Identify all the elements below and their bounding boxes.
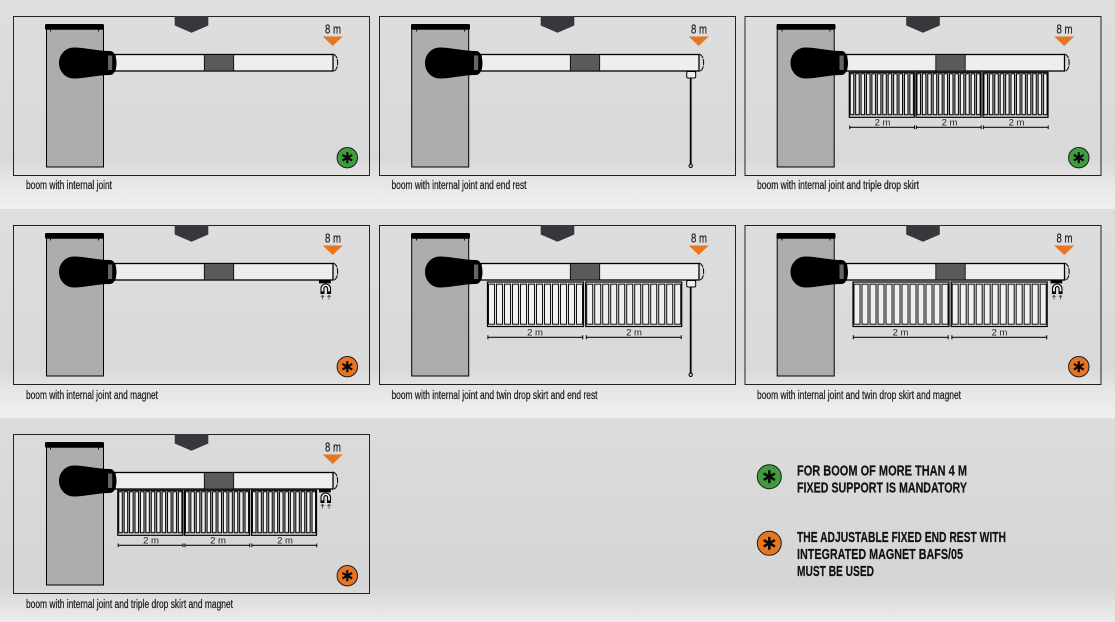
length label: 8 m bbox=[325, 440, 341, 454]
post bbox=[412, 236, 469, 376]
barrier gate bbox=[45, 434, 343, 496]
legend text: end rest with magnet: INTEGRATED MAGNET BAFS/05 bbox=[797, 546, 963, 563]
end rest bbox=[687, 280, 696, 376]
barrier gate bbox=[45, 225, 343, 288]
panel: boom with internal joint and twin drop skirt and magnet bbox=[745, 225, 1101, 402]
icon: green asterisk bbox=[1069, 148, 1089, 168]
dimensions: 2 m bbox=[893, 328, 909, 338]
dimensions bbox=[849, 118, 1048, 129]
post bbox=[46, 236, 104, 376]
dimensions: 2 m bbox=[942, 118, 958, 128]
length label: 8 m bbox=[325, 230, 341, 246]
legend text: fixed support: FIXED SUPPORT IS MANDATORY bbox=[797, 479, 967, 496]
dimensions bbox=[488, 328, 682, 339]
panel: boom with internal joint and magnet bbox=[14, 225, 370, 402]
panel: boom with internal joint and end rest bbox=[380, 16, 736, 192]
barrier gate bbox=[776, 16, 1074, 78]
dimensions: 2 m bbox=[143, 536, 159, 546]
triple drop skirt bbox=[118, 490, 316, 535]
caption: boom with internal joint and twin drop skirt and magnet bbox=[757, 390, 962, 402]
background band: row 3 bbox=[0, 418, 1115, 622]
panel: boom with internal joint and twin drop skirt and end rest bbox=[380, 225, 736, 402]
dimensions: 2 m bbox=[210, 536, 226, 546]
caption: boom with internal joint and triple drop skirt bbox=[757, 180, 920, 192]
legend text: end rest with magnet: THE ADJUSTABLE FIXED END REST WITH bbox=[797, 529, 1006, 546]
legend text: end rest with magnet bbox=[797, 529, 1006, 580]
dimensions: 2 m bbox=[992, 328, 1008, 338]
dimensions: 2 m bbox=[626, 328, 642, 338]
background band: row 1 bbox=[0, 0, 1115, 209]
length label: 8 m bbox=[325, 22, 341, 36]
post bbox=[777, 27, 834, 167]
background band: row 2 bbox=[0, 209, 1115, 418]
panel: boom with internal joint and triple drop skirt bbox=[745, 16, 1101, 192]
legend text: fixed support bbox=[797, 462, 967, 496]
dimensions: 2 m bbox=[527, 328, 543, 338]
caption: boom with internal joint and end rest bbox=[392, 180, 527, 192]
post bbox=[777, 236, 834, 376]
triple drop skirt bbox=[849, 72, 1048, 117]
icon: orange asterisk bbox=[1069, 356, 1089, 377]
caption: boom with internal joint and triple drop skirt and magnet bbox=[26, 599, 234, 611]
legend: orange note bbox=[757, 529, 1006, 580]
dimensions bbox=[853, 328, 1047, 339]
icon: magnet bbox=[1050, 280, 1062, 300]
panel: boom with internal joint and triple drop skirt and magnet bbox=[14, 434, 370, 611]
caption: boom with internal joint and magnet bbox=[26, 390, 159, 402]
icon: green asterisk bbox=[337, 148, 358, 168]
post bbox=[46, 445, 104, 585]
legend text: fixed support: FOR BOOM OF MORE THAN 4 M bbox=[797, 462, 967, 479]
length label: 8 m bbox=[691, 22, 707, 36]
length label: 8 m bbox=[1056, 230, 1072, 246]
end rest bbox=[687, 72, 696, 168]
dimensions bbox=[118, 536, 317, 547]
caption: boom with internal joint and twin drop skirt and end rest bbox=[392, 390, 598, 402]
barrier gate bbox=[411, 16, 709, 78]
barrier gate bbox=[45, 16, 343, 78]
legend text: end rest with magnet: MUST BE USED bbox=[797, 563, 874, 580]
icon: orange asterisk bbox=[337, 566, 358, 586]
icon: magnet bbox=[319, 489, 331, 508]
dimensions: 2 m bbox=[875, 118, 891, 128]
twin drop skirt bbox=[488, 282, 682, 326]
icon: orange asterisk bbox=[757, 531, 781, 555]
icon: magnet bbox=[319, 280, 331, 300]
panel: boom with internal joint bbox=[14, 16, 370, 192]
icon: orange asterisk bbox=[337, 356, 358, 377]
dimensions: 2 m bbox=[1009, 118, 1025, 128]
post bbox=[412, 27, 469, 167]
post bbox=[46, 27, 104, 167]
length label: 8 m bbox=[691, 230, 707, 246]
caption: boom with internal joint bbox=[26, 180, 113, 192]
twin drop skirt bbox=[853, 282, 1047, 326]
barrier gate bbox=[776, 225, 1074, 288]
barrier gate bbox=[411, 225, 709, 288]
length label: 8 m bbox=[1056, 22, 1072, 36]
icon: green asterisk bbox=[757, 465, 781, 489]
dimensions: 2 m bbox=[277, 536, 293, 546]
legend: green note bbox=[757, 462, 967, 496]
